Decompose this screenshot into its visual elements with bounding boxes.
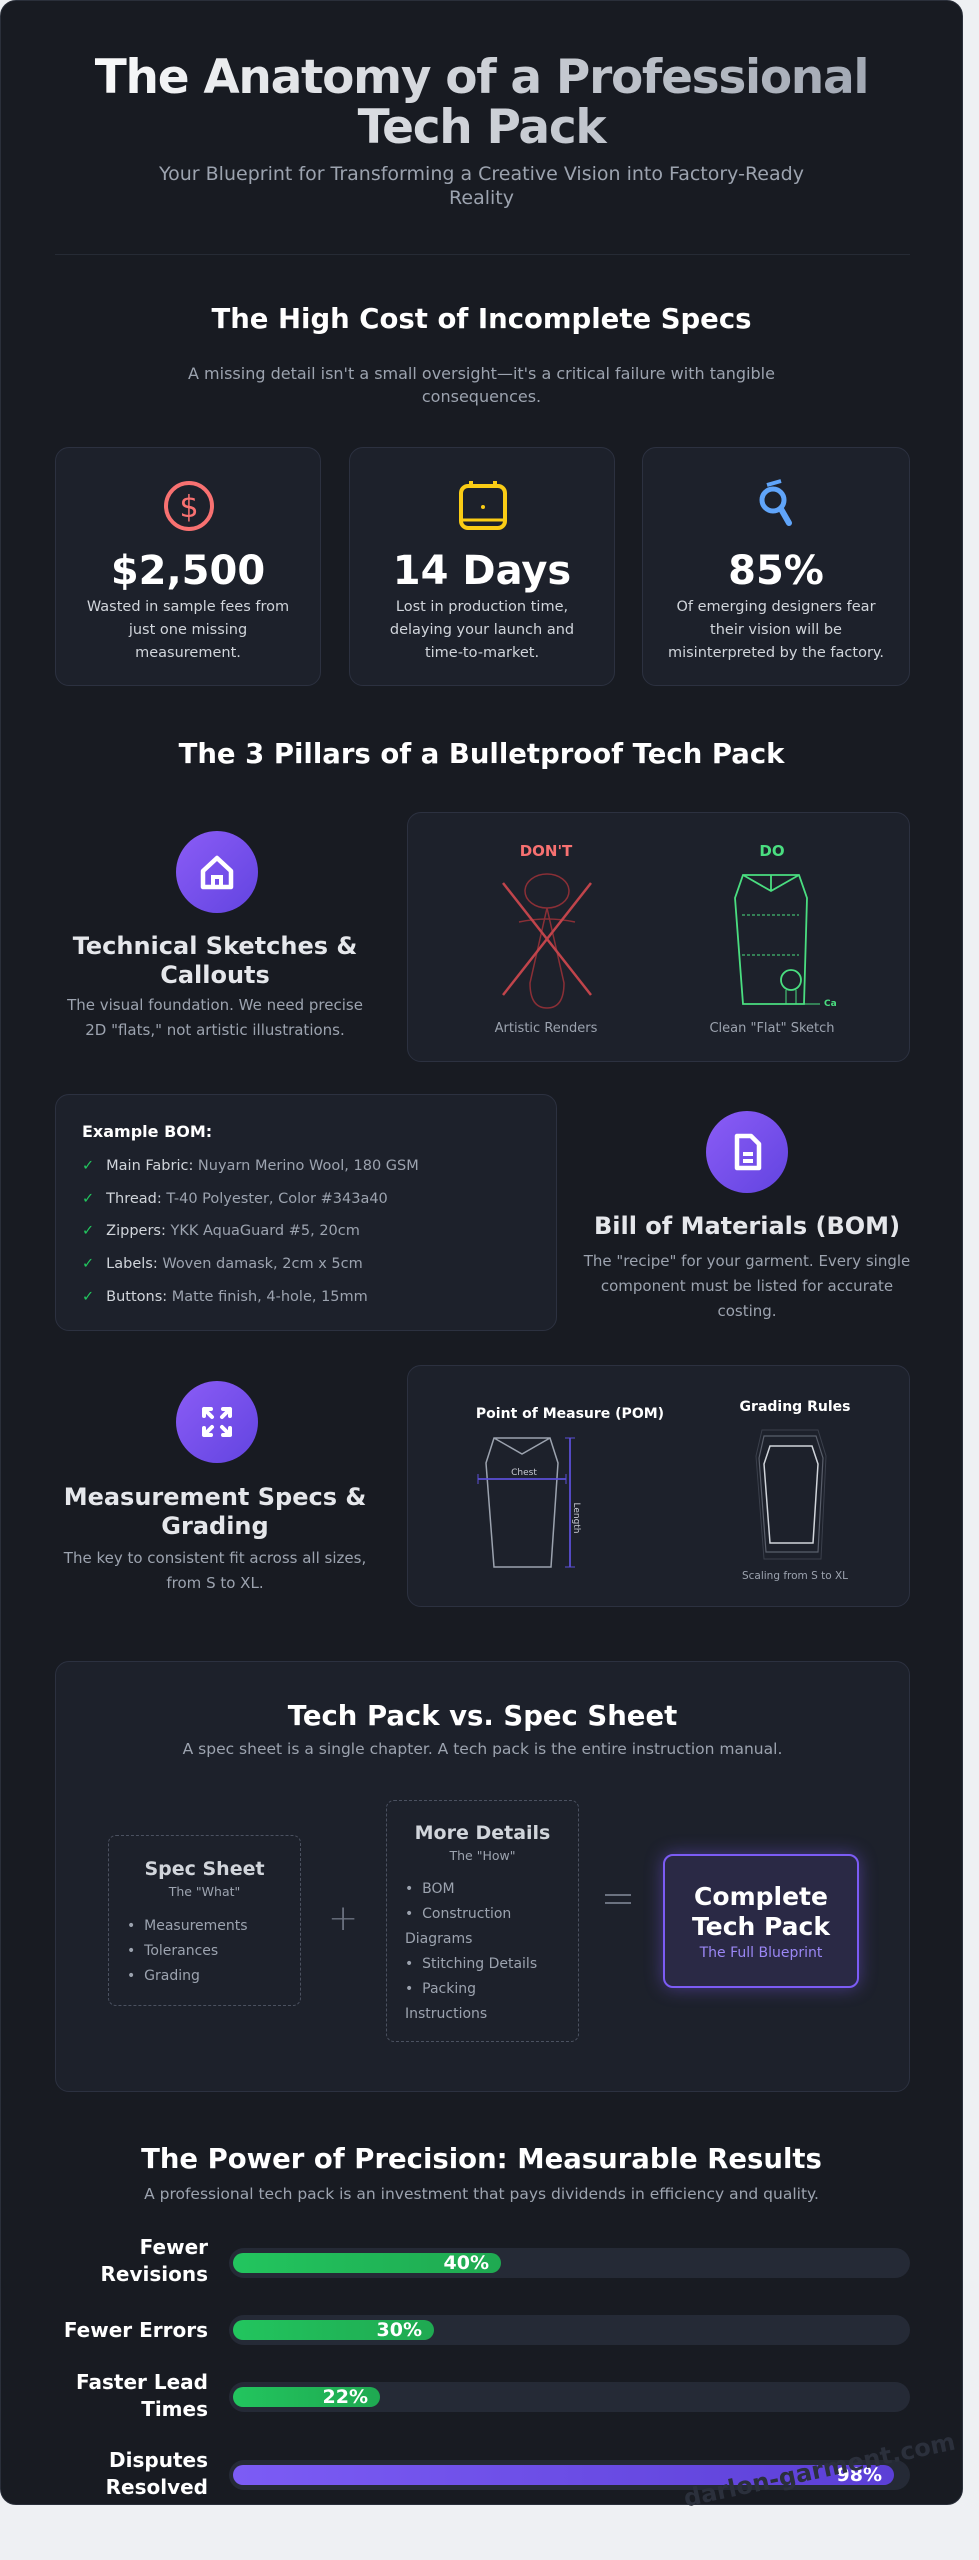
icon: equals: [605, 1894, 631, 1904]
POM diagram: Chest: [511, 1468, 537, 1478]
bom list: ✓ Thread: T-40 Polyester, Color #343a40: [82, 1191, 388, 1207]
box: complete tech pack: Tech Pack: [692, 1912, 830, 1941]
icon: calendar: [459, 481, 507, 530]
box: more details: [386, 1800, 579, 2042]
pillar desc: The key to consistent fit across all sizes, from S to XL.: [64, 1549, 366, 1592]
stat card: 85%: [642, 447, 910, 686]
bom list: ✓ Zippers: YKK AquaGuard #5, 20cm: [82, 1223, 360, 1239]
icon: plus: +: [328, 1898, 358, 1939]
don't sketch: Clean "Flat" Sketch: [709, 1021, 835, 1036]
bar chart: Resolved: [106, 2475, 208, 2499]
bar chart: Fewer: [140, 2235, 208, 2259]
bar chart: 22%: [323, 2386, 368, 2408]
panel: do / don't sketches: [407, 812, 910, 1062]
grading diagram: [740, 1399, 850, 1582]
box: complete tech pack: The Full Blueprint: [700, 1945, 822, 1961]
panel: tech pack vs spec sheet: [55, 1661, 910, 2092]
icon: dollar: $: [179, 490, 199, 525]
pillar title: Technical Sketches & Callouts: [73, 932, 357, 989]
bom list: [82, 1158, 419, 1305]
POM diagram: Length: [571, 1502, 581, 1534]
stat card: 85%: Of emerging designers fear their vision will be misinterpreted by the factory.: [668, 599, 884, 661]
bar chart: Faster Lead: [76, 2370, 208, 2394]
box: more details: • Construction Diagrams: [405, 1906, 511, 1947]
subheading: results: A professional tech pack is an investment that pays dividends in efficiency and quality.: [144, 2185, 819, 2203]
bar chart: [64, 2235, 910, 2499]
intro text: cost: A missing detail isn't a small oversight—it's a critical failure with tangible consequences.: [188, 364, 775, 406]
bar chart: Fewer Errors: [64, 2318, 208, 2342]
POM diagram: Point of Measure (POM): [476, 1406, 664, 1422]
don't sketch: [494, 842, 837, 1036]
bar chart: 40%: [444, 2252, 489, 2274]
box: spec sheet: The "What": [169, 1884, 240, 1899]
subtitle: Your Blueprint for Transforming a Creative Vision into Factory-Ready Reality: [159, 163, 804, 209]
pillar 3: measurement: [64, 1381, 366, 1592]
stat card: $2,500: $2,500: [111, 548, 265, 594]
stat card: 14 days: 14 Days: [393, 548, 571, 594]
pillar desc: The visual foundation. We need precise 2D "flats," not artistic illustrations.: [67, 996, 363, 1039]
box: more details: More Details: [415, 1822, 550, 1844]
icon: house: [176, 831, 258, 913]
pillar desc: The "recipe" for your garment. Every single component must be listed for accurate costing.: [584, 1252, 910, 1320]
box: spec sheet: • Measurements: [127, 1918, 248, 1934]
heading: high cost: The High Cost of Incomplete Specs: [211, 303, 752, 335]
heading: results: The Power of Precision: Measurable Results: [141, 2143, 822, 2175]
pillar title: Measurement Specs & Grading: [64, 1483, 366, 1540]
box: spec sheet: • Grading: [127, 1968, 200, 1984]
icon: confused search: [760, 479, 792, 526]
bar chart: Disputes: [109, 2448, 208, 2472]
bom heading: Example BOM:: [82, 1122, 212, 1141]
icon: expand arrows: [176, 1381, 258, 1463]
box: complete tech pack: Complete: [694, 1882, 828, 1911]
don't sketch: Ca: [824, 999, 837, 1009]
box: more details: The "How": [450, 1848, 516, 1863]
bar chart: Times: [141, 2397, 208, 2421]
don't sketch: Artistic Renders: [495, 1021, 598, 1036]
icon: dollar: [164, 481, 214, 531]
do sketch: DO: [759, 842, 785, 860]
heading: Tech Pack vs. Spec Sheet: [288, 1700, 677, 1732]
pillar title: Bill of Materials (BOM): [594, 1212, 900, 1240]
bar chart: Revisions: [100, 2262, 208, 2286]
bar chart: 30%: [377, 2319, 422, 2341]
title: Tech Pack: [358, 100, 605, 155]
subheading: A spec sheet is a single chapter. A tech pack is the entire instruction manual.: [183, 1740, 782, 1758]
stat card: $2,500: [55, 447, 321, 686]
box: spec sheet: • Tolerances: [127, 1943, 218, 1959]
grading diagram: Scaling from S to XL: [742, 1570, 848, 1582]
box: more details: • BOM: [405, 1881, 455, 1897]
box: complete tech pack: [663, 1854, 859, 1988]
POM diagram: [476, 1406, 664, 1567]
icon: document: [706, 1111, 788, 1193]
don't sketch: DON'T: [520, 842, 573, 860]
title: The Anatomy of a Professional: [95, 50, 868, 105]
stat card: $2,500: Wasted in sample fees from just one missing measurement.: [87, 599, 289, 661]
box: spec sheet: [108, 1835, 301, 2006]
box: spec sheet: Spec Sheet: [144, 1858, 265, 1880]
stat card: 14 days: [349, 447, 615, 686]
bom list: ✓ Labels: Woven damask, 2cm x 5cm: [82, 1256, 363, 1272]
panel: example BOM: [55, 1094, 557, 1331]
stat card: 85%: 85%: [728, 548, 824, 594]
panel: POM & grading: [407, 1365, 910, 1607]
pillar 1: sketches: [67, 831, 363, 1039]
pillar 2: BOM: [584, 1111, 910, 1320]
bom list: ✓ Buttons: Matte finish, 4-hole, 15mm: [82, 1289, 368, 1305]
watermark: darlon-garment.com: [681, 2428, 958, 2512]
heading: 3 pillars: The 3 Pillars of a Bulletproof Tech Pack: [179, 738, 784, 770]
grading diagram: Grading Rules: [740, 1399, 850, 1415]
title: [41, 53, 922, 153]
bar chart: 98%: [837, 2464, 882, 2486]
stat card: 14 days: Lost in production time, delaying your launch and time-to-market.: [390, 599, 574, 661]
box: more details: • Stitching Details: [405, 1956, 537, 1972]
box: more details: • Packing Instructions: [405, 1981, 487, 2022]
bom list: ✓ Main Fabric: Nuyarn Merino Wool, 180 GSM: [82, 1158, 419, 1174]
